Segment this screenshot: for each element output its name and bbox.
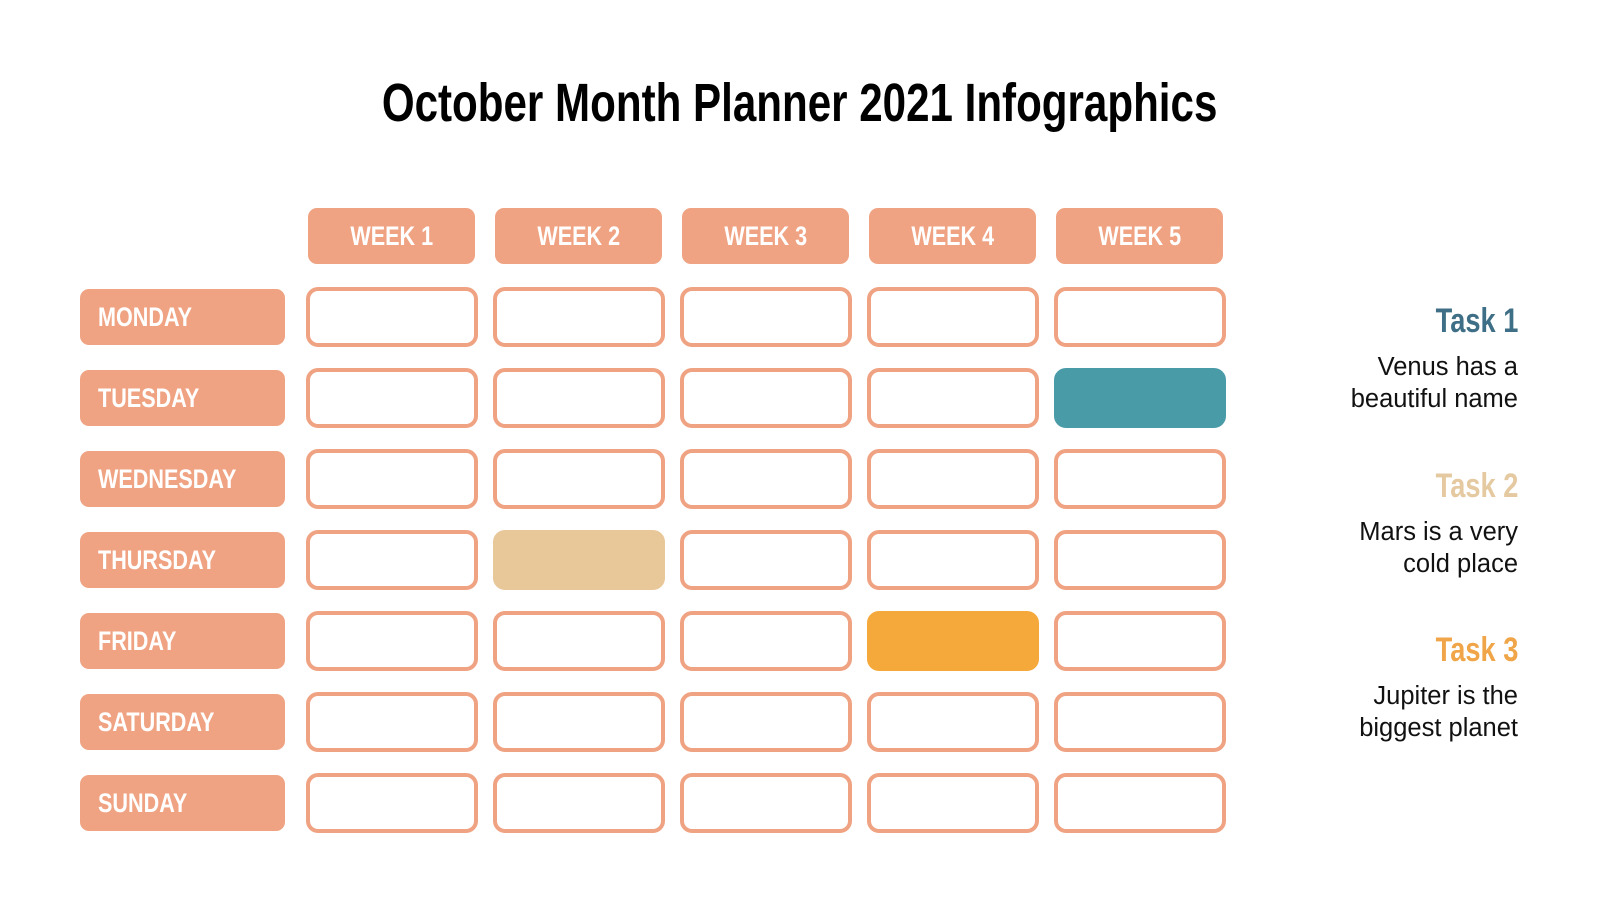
legend: task 2: Mars is a very xyxy=(1359,518,1518,546)
legend: task 3: Jupiter is the xyxy=(1373,682,1518,710)
task 2 cell (tan) xyxy=(493,530,665,590)
legend: task 2: Task 2 xyxy=(1435,467,1518,505)
day: friday: FRIDAY xyxy=(98,626,176,656)
header: week 1 xyxy=(308,208,475,264)
header: week 3: WEEK 3 xyxy=(724,220,807,250)
legend: task 3: biggest planet xyxy=(1359,714,1518,742)
day: wednesday xyxy=(80,451,285,507)
legend: task 1 xyxy=(1351,302,1518,413)
day: monday xyxy=(80,289,285,345)
day: sunday xyxy=(80,775,285,831)
header: week 1: WEEK 1 xyxy=(350,220,433,250)
day: tuesday xyxy=(80,370,285,426)
header: week 3 xyxy=(682,208,849,264)
legend: task 2 xyxy=(1359,467,1518,578)
day: sunday: SUNDAY xyxy=(98,788,187,818)
day: saturday: SATURDAY xyxy=(98,706,214,736)
day: wednesday: WEDNESDAY xyxy=(98,464,236,494)
header: week 4 xyxy=(869,208,1036,264)
header: week 5 xyxy=(1056,208,1223,264)
header: week 2 xyxy=(495,208,662,264)
header: week 5: WEEK 5 xyxy=(1098,220,1181,250)
title: October Month Planner 2021 Infographics xyxy=(382,73,1218,133)
header: week 2: WEEK 2 xyxy=(537,220,620,250)
day: thursday: THURSDAY xyxy=(98,544,216,574)
legend: task 2: cold place xyxy=(1403,550,1518,578)
legend: task 3 xyxy=(1359,631,1518,742)
day: monday: MONDAY xyxy=(98,302,192,332)
legend: task 1: beautiful name xyxy=(1351,385,1518,413)
header: week 4: WEEK 4 xyxy=(911,220,994,250)
legend: task 3: Task 3 xyxy=(1435,631,1518,669)
week headers xyxy=(308,208,1223,264)
day: saturday xyxy=(80,694,285,750)
day: tuesday: TUESDAY xyxy=(98,382,199,412)
task 1 cell (teal) xyxy=(1054,368,1226,428)
planner grid xyxy=(306,287,1226,833)
legend: task 1: Task 1 xyxy=(1435,302,1518,340)
day: thursday xyxy=(80,532,285,588)
task 3 cell (orange) xyxy=(867,611,1039,671)
day labels xyxy=(80,289,285,831)
day: friday xyxy=(80,613,285,669)
legend: task 1: Venus has a xyxy=(1378,353,1518,381)
